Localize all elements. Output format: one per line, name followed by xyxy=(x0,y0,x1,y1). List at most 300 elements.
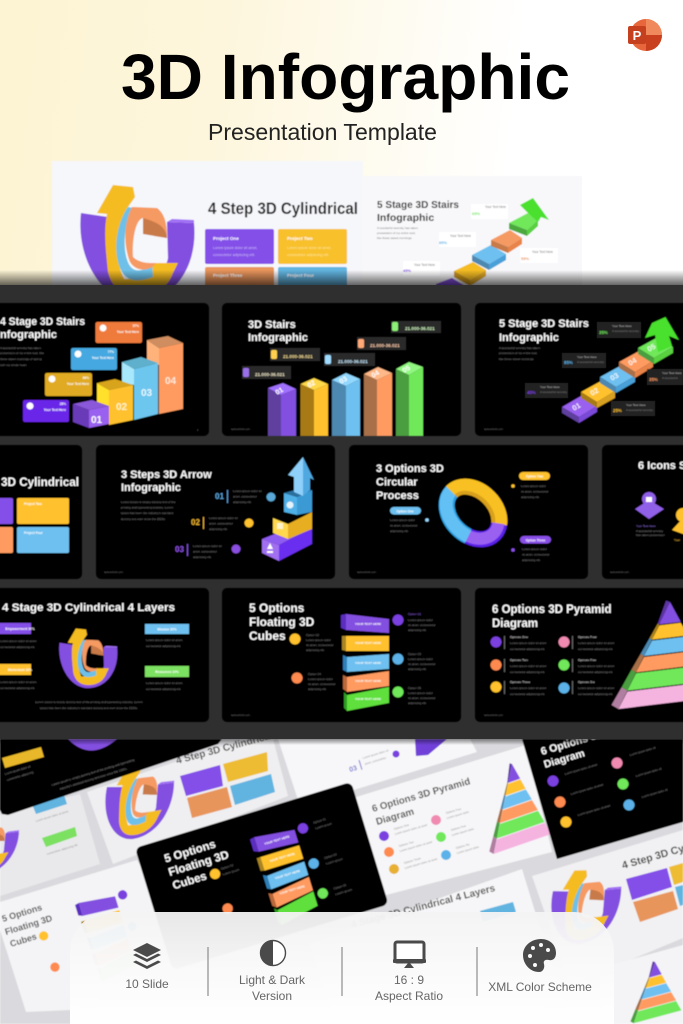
option list: consectetur adipiscing elit. xyxy=(510,647,545,651)
3D cylinder illustration xyxy=(80,185,195,302)
label: green: consectetur adipiscing elit. xyxy=(146,687,181,691)
value tags xyxy=(242,321,441,379)
slide heading: 4 Step 3D Cylindrical xyxy=(175,730,274,767)
light slide: 5 options cubes left: Floating 3D xyxy=(4,913,54,937)
body text: like these sweet mornings. xyxy=(377,236,413,240)
dark slide: 5 options floating cubes center: 5 Options xyxy=(163,839,217,866)
slide: 4 Stage 3D Cylindrical 4 Layers xyxy=(0,588,209,722)
icon: yellow marker xyxy=(672,508,683,542)
cube labels: YOUR TEXT HERE xyxy=(355,622,381,626)
option notes: Lorem ipsum dolor xyxy=(408,618,433,622)
footer: www.website.com xyxy=(357,571,376,574)
3D stairs: 03 xyxy=(608,371,620,383)
light slide: 5 options cubes left: Cubes xyxy=(9,931,38,949)
slide heading: Floating 3D xyxy=(249,615,315,629)
page number: 3 xyxy=(197,429,199,432)
icon: purple shop marker: has taken possession xyxy=(636,533,665,537)
step 03: adipiscing elit. xyxy=(193,555,212,559)
cylinder chart xyxy=(59,629,117,688)
icon: PowerPoint logo xyxy=(628,19,662,51)
stat cards: 77% xyxy=(108,350,114,354)
panel: dark showcase band xyxy=(0,285,683,739)
option: blue pill xyxy=(390,507,429,533)
light slide: 3 steps arrow rear: amet, consectetur xyxy=(364,756,387,766)
dark slide: 5 options floating cubes center: YOUR TEXT HERE xyxy=(274,869,301,880)
slide: 6 Icons (cropped) xyxy=(602,445,683,579)
dark slide: 5 options floating cubes center: YOUR TEXT HERE xyxy=(264,834,290,846)
icon: PowerPoint logo: P xyxy=(633,28,642,43)
option notes: sit amet, consectetur xyxy=(308,682,336,686)
option: yellow pill: Lorem ipsum dolor xyxy=(521,484,546,488)
light slide: 3 steps arrow rear: 03 xyxy=(349,765,358,774)
stat boxes: A wonderful serenity xyxy=(626,408,654,412)
slide: 5 Stage 3D Stairs xyxy=(475,303,683,436)
pyramid xyxy=(479,752,551,855)
label: blue: Mission 30% xyxy=(157,628,177,632)
stat cards: Your Text Here xyxy=(67,382,89,386)
dark slide: top left: Lorem ipsum dolor sit xyxy=(4,764,31,776)
light slide: cylindrical layers left: consectetur adipiscing elit. xyxy=(46,842,79,856)
stat boxes: Your Text Here xyxy=(540,385,560,389)
light slide: 5 options cubes left xyxy=(0,860,200,1012)
footer: www.website.com xyxy=(104,571,123,574)
caption: Ipsum has been the industry's standard dummy text ever since the 1500s. xyxy=(40,706,138,710)
option list: Options Five xyxy=(578,658,596,662)
body text xyxy=(499,346,540,361)
band bottom shadow xyxy=(0,739,683,745)
stat labels: 85% xyxy=(439,240,447,245)
stat boxes: A wonderful serenity xyxy=(612,329,640,333)
footer: www.website.com xyxy=(231,714,250,717)
slide heading: 5 Stage 3D Stairs xyxy=(377,199,459,211)
slide: 3 Steps 3D Arrow xyxy=(96,445,335,579)
option notes: adipiscing elit. xyxy=(408,701,427,705)
icon: purple shop marker xyxy=(635,492,665,537)
value tags: 21.000-36.021 xyxy=(255,372,285,377)
subtitle: Presentation Template xyxy=(208,119,437,145)
title: 3D Infographic xyxy=(121,41,570,113)
option: purple pill: sit amet, consectetur xyxy=(522,552,550,556)
option notes: sit amet, consectetur xyxy=(306,643,334,647)
stat boxes: A wonderful serenity xyxy=(540,390,568,394)
body text: possession of my entire soul, xyxy=(377,231,416,235)
option: blue pill: adipiscing elit. xyxy=(390,529,409,533)
stat boxes: A wonderful xyxy=(662,376,678,380)
option markers xyxy=(379,831,389,841)
value tags: 21.000-36.021 xyxy=(405,326,435,331)
card: project three: Project Three xyxy=(213,273,243,278)
step 02: adipiscing elit. xyxy=(209,527,228,531)
option list: Options Six xyxy=(578,680,595,684)
dark slide: 5 options floating cubes center: Lorem ipsum xyxy=(315,821,333,830)
value tags: 21.000-36.021 xyxy=(370,343,400,348)
stat cards: Your Text Here xyxy=(44,408,66,412)
step 01: adipiscing elit. xyxy=(233,500,252,504)
dark slide: top right pyramid: Lorem ipsum dolor sit xyxy=(641,787,668,799)
label: light and dark: Light & Dark xyxy=(239,973,306,987)
light slide: 4 layers cylindrical: 4 Stage 3D Cylindrical 4 Layers xyxy=(350,883,497,931)
option: purple pill: adipiscing elit. xyxy=(522,558,541,562)
stat boxes: Your Text Here xyxy=(662,371,682,375)
stat labels: Your Text Here xyxy=(532,250,553,254)
stat cards: Your Text Here xyxy=(117,330,139,334)
light slide: cylindrical layers left: Lorem ipsum dolor sit amet, xyxy=(35,809,70,823)
option list: consectetur adipiscing elit. xyxy=(578,647,613,651)
floating cubes xyxy=(290,614,404,711)
donut chart xyxy=(433,473,513,553)
body text: like these sweet mornings. xyxy=(499,357,535,361)
caption xyxy=(35,700,143,710)
icon: monitor xyxy=(393,942,426,968)
option list: Lorem ipsum dolor sit amet xyxy=(578,641,614,645)
step 02: 02 xyxy=(191,518,200,527)
stat cards: Your Text Here xyxy=(92,356,114,360)
body text xyxy=(121,500,176,521)
step 01: Lorem ipsum dolor sit xyxy=(233,489,262,493)
option: purple pill: Option Three xyxy=(526,538,546,542)
card: project one: Lorem ipsum dolor sit amet, xyxy=(213,246,257,250)
dark slide: 5 options floating cubes center: YOUR TEXT HERE xyxy=(269,852,295,863)
body text: Lorem Ipsum is simply dummy text of the xyxy=(121,500,176,504)
option list: Lorem ipsum dolor sit amet xyxy=(510,641,546,645)
step 02 xyxy=(191,516,254,531)
label: green: Lorem ipsum dolor sit amet, xyxy=(146,681,183,685)
icon: palette xyxy=(523,939,556,972)
label: aspect ratio: 16 : 9 xyxy=(394,973,424,987)
slide heading xyxy=(248,319,308,344)
slide heading: 5 Options xyxy=(249,601,305,615)
slide heading xyxy=(499,318,589,344)
option list: Lorem ipsum dolor sit amet xyxy=(510,664,546,668)
light slide: 4 step cylindrical right xyxy=(532,830,683,985)
cube labels: YOUR TEXT HERE xyxy=(355,679,381,683)
dark slide: 5 options floating cubes center: Lorem ipsum xyxy=(222,867,240,876)
option list: Options Three xyxy=(510,680,531,684)
label: light and dark xyxy=(239,973,306,1003)
step 02: Lorem ipsum dolor sit xyxy=(209,516,238,520)
3D bars: 03 xyxy=(141,388,153,399)
option: yellow pill xyxy=(511,472,550,499)
option: purple pill: Lorem ipsum dolor xyxy=(522,547,547,551)
option: yellow pill: adipiscing elit. xyxy=(521,495,540,499)
panel: 4 Step 3D Cylindrical light slide xyxy=(52,161,363,302)
divider xyxy=(342,947,343,996)
light slide: 6 options pyramid xyxy=(340,745,552,905)
stat cards: 28% xyxy=(60,402,66,406)
step 01 xyxy=(215,489,276,504)
stat labels: 45% xyxy=(403,268,411,273)
option notes: sit amet, consectetur xyxy=(408,623,436,627)
option notes: Option 05 xyxy=(408,686,421,690)
slide: 5 Options Floating 3D Cubes xyxy=(222,588,461,722)
panel: feature bar xyxy=(70,912,614,1024)
stat cards: 57% xyxy=(133,324,139,328)
3D columns xyxy=(268,362,423,436)
dark slide: 5 options floating cubes center xyxy=(135,782,389,970)
stat boxes xyxy=(525,322,683,416)
slide: 4 Stage 3D Stairs xyxy=(0,303,209,436)
stat boxes: 35% xyxy=(599,330,608,335)
label: yellow xyxy=(0,664,37,690)
cube labels: YOUR TEXT HERE xyxy=(355,641,381,645)
option notes: Lorem ipsum dolor xyxy=(408,691,433,695)
light slide: 6 options pyramid: Lorem ipsum dolor sit amet xyxy=(404,857,438,870)
stat labels: 55% xyxy=(521,256,529,261)
body text: possession of my entire soul, xyxy=(499,351,538,355)
3D bars xyxy=(73,336,183,428)
option notes: Option 03 xyxy=(408,652,421,656)
value tags: 21.000-36.021 xyxy=(283,354,313,359)
stat boxes: 25% xyxy=(613,408,622,413)
option list: Lorem ipsum dolor sit amet xyxy=(578,664,614,668)
project cards xyxy=(626,868,672,900)
label: yellow: Momentum 20% xyxy=(8,668,32,672)
label: blue xyxy=(145,624,189,648)
cube labels: YOUR TEXT HERE xyxy=(355,697,381,701)
step 01: 01 xyxy=(215,492,224,501)
pyramid xyxy=(612,594,683,710)
stat labels xyxy=(403,204,558,276)
stat labels: Your Text Here xyxy=(450,234,471,238)
dark slide: 5 options floating cubes center: Option 03 xyxy=(324,852,338,860)
footer: www.website.com xyxy=(484,714,503,717)
icon: yellow marker: Your xyxy=(674,538,680,542)
divider xyxy=(208,947,209,996)
slide: 3 Options 3D Circular Process xyxy=(349,445,588,579)
icon: purple shop marker: A wonderful serenity xyxy=(636,529,664,533)
option notes: adipiscing elit. xyxy=(308,687,327,691)
stat boxes: Your Text Here xyxy=(612,324,632,328)
body text: dummy text ever since the 1500s. xyxy=(121,517,166,521)
body text: possession of my entire soul, like xyxy=(0,351,44,355)
light slide: 6 options pyramid: Lorem ipsum dolor xyxy=(451,827,475,837)
dark slide: 5 options floating cubes center: Lorem ipsum xyxy=(325,857,344,866)
project cards: Project Four xyxy=(24,531,44,535)
option: purple pill xyxy=(511,536,551,562)
slide heading: 4 Stage 3D Stairs xyxy=(0,316,85,328)
slide heading: 4 Step 3D Cylindrical xyxy=(208,200,358,218)
light slide: 6 options pyramid: Options Five xyxy=(450,824,467,832)
option notes: Option 04 xyxy=(308,672,321,676)
project cards: Project Two xyxy=(24,502,42,506)
label: color scheme: XML Color Scheme xyxy=(488,980,592,994)
option notes: adipiscing elit. xyxy=(306,648,325,652)
stat boxes: 85% xyxy=(564,360,573,365)
option list: consectetur adipiscing elit. xyxy=(578,670,613,674)
light slide: 6 options pyramid: Diagram xyxy=(375,806,416,828)
panel: 5 Stage 3D Stairs light slide xyxy=(363,176,582,289)
dark slide: top right pyramid: Lorem ipsum dolor sit xyxy=(635,766,662,778)
slide heading xyxy=(492,604,612,630)
3D columns: 03 xyxy=(338,376,349,386)
light slide: 4 layers cylindrical xyxy=(310,869,563,1024)
light slide: 6 options pyramid: Options Two xyxy=(398,840,415,848)
body text xyxy=(377,226,418,240)
label: purple: Empowerment 30% xyxy=(5,627,35,631)
body text: A wonderful serenity has taken xyxy=(499,346,540,350)
slide heading: 4 Stage 3D Cylindrical 4 Layers xyxy=(2,602,175,614)
slide heading: 5 Stage 3D Stairs xyxy=(499,318,589,330)
card: project two: Project Two xyxy=(287,236,313,241)
option list: Options One xyxy=(510,635,528,639)
light slide: 6 options pyramid: Options Four xyxy=(445,807,462,815)
slide heading: 3D Cylindrical xyxy=(1,477,79,489)
card: project four xyxy=(278,267,347,289)
slide heading xyxy=(121,469,212,494)
slide heading: Circular xyxy=(376,476,418,488)
slide: 4 Step 3D Cylindrical (cropped) xyxy=(0,445,82,579)
body text: A wonderful serenity has taken xyxy=(0,346,41,350)
footer: www.website.com xyxy=(610,571,629,574)
option list: Lorem ipsum dolor sit amet xyxy=(578,686,614,690)
slide heading xyxy=(249,601,315,643)
3D bars: 02 xyxy=(116,402,128,413)
cylinder xyxy=(100,758,177,844)
option list: consectetur adipiscing elit. xyxy=(578,692,613,696)
stat cards xyxy=(23,322,142,422)
label: aspect ratio: Aspect Ratio xyxy=(375,989,443,1003)
light slide: 6 options pyramid: Options Six xyxy=(455,842,471,850)
label: blue: Lorem ipsum dolor sit amet, xyxy=(146,638,183,642)
card: project one: consectetur adipiscing elit. xyxy=(213,253,255,257)
slide: 6 Options 3D Pyramid Diagram xyxy=(475,588,683,722)
option notes: adipiscing elit. xyxy=(408,628,427,632)
dark slide: top right pyramid: Lorem ipsum dolor sit amet xyxy=(577,803,611,817)
light slide: 6 options pyramid: Lorem ipsum dolor xyxy=(456,845,480,855)
slide heading xyxy=(376,463,444,502)
light slide: cylindrical layers left xyxy=(0,794,100,896)
footer: www.website.com xyxy=(484,428,503,431)
card: project one: Project One xyxy=(213,236,239,241)
option: blue pill: Lorem ipsum dolor xyxy=(390,518,415,522)
step 03: 03 xyxy=(175,545,184,554)
stat cards: 66% xyxy=(83,376,89,380)
option list: Lorem ipsum dolor sit amet xyxy=(510,686,546,690)
card: project two xyxy=(278,229,347,264)
slide heading: Cubes xyxy=(249,629,286,643)
option notes: adipiscing elit. xyxy=(408,667,427,671)
option notes: sit amet, consectetur xyxy=(408,662,436,666)
dark slide: top right pyramid: Lorem ipsum dolor sit xyxy=(629,745,656,757)
light slide: 5 options cubes left: 5 Options xyxy=(1,902,43,924)
slide: 3D Stairs xyxy=(222,303,461,436)
divider xyxy=(476,947,478,996)
light slide: 6 options pyramid: Lorem ipsum dolor sit amet xyxy=(394,823,428,836)
card: project four: Project Four xyxy=(287,273,314,278)
label: purple: consectetur adipiscing elit. xyxy=(0,645,35,649)
dark slide: 5 options floating cubes center: Floating 3D xyxy=(167,849,230,879)
stat labels: 65% xyxy=(472,211,480,216)
dark slide: 5 options floating cubes center: Cubes xyxy=(171,871,208,892)
slide heading: 6 Options 3D Pyramid xyxy=(492,604,612,616)
dark slide: top right pyramid xyxy=(522,728,683,859)
option notes xyxy=(306,612,436,705)
option: blue pill: sit amet, consectetur xyxy=(390,524,418,528)
stat boxes: 35% xyxy=(649,377,658,382)
label: blue: consectetur adipiscing elit. xyxy=(146,644,181,648)
option notes: Option 01 xyxy=(408,612,421,616)
value tags: 21.000-36.021 xyxy=(338,359,368,364)
card: project three xyxy=(205,267,274,289)
project cards xyxy=(0,498,69,553)
dark slide: top left: consectetur adipiscing xyxy=(6,770,34,782)
dark slide: top left xyxy=(0,739,222,815)
label: purple xyxy=(0,623,37,649)
dark slide: top left: Lorem ipsum is simply dummy text of the printing and typesetting xyxy=(51,758,135,787)
label: purple: Lorem ipsum dolor sit amet, xyxy=(0,639,37,643)
light slide: 6 options pyramid: Lorem ipsum dolor xyxy=(446,810,470,820)
3D stairs: 04 xyxy=(626,355,639,368)
option list: Options Four xyxy=(578,635,598,639)
dark slide: 5 options floating cubes center: Lorem ipsum xyxy=(335,887,353,896)
stat labels: Your Text Here xyxy=(485,205,506,209)
light slide: 3 steps arrow rear xyxy=(278,739,477,806)
step 02: amet, consectetur xyxy=(209,522,233,526)
label: yellow: Lorem ipsum dolor sit amet, xyxy=(0,680,37,684)
body text: these sweet mornings of spring xyxy=(0,357,42,361)
stat boxes: A wonderful serenity xyxy=(577,360,605,364)
slide heading: Process xyxy=(376,490,419,502)
slide heading: Infographic xyxy=(121,482,181,494)
slide heading: Diagram xyxy=(492,618,538,630)
card: project two: Lorem ipsum dolor sit amet, xyxy=(287,246,331,250)
3D stairs xyxy=(562,317,679,423)
label: light and dark: Version xyxy=(252,989,292,1003)
stat labels: Your Text Here xyxy=(414,263,435,267)
3D columns: 04 xyxy=(370,370,381,380)
light slide: 6 options pyramid: Options One xyxy=(393,823,410,831)
option notes: Lorem ipsum dolor xyxy=(408,657,433,661)
label: green: Resources 10% xyxy=(155,670,179,674)
cylinder xyxy=(546,864,624,948)
icon: purple shop marker: Your Text Here xyxy=(636,524,656,528)
3D stairs: 01 xyxy=(570,401,582,413)
body text: printing and typesetting industry. Lorem xyxy=(121,506,174,510)
dark slide: top right pyramid: Lorem ipsum dolor sit amet xyxy=(570,782,604,796)
light slide: 6 options pyramid: Options Three xyxy=(403,856,422,865)
band top shadow xyxy=(0,270,683,285)
option notes: Lorem ipsum dolor xyxy=(306,638,331,642)
step 03 xyxy=(175,544,240,559)
project cards xyxy=(180,765,223,796)
label: 10 slide: 10 Slide xyxy=(125,977,169,991)
3D bars: 04 xyxy=(165,376,177,387)
3D arrow stack xyxy=(262,457,314,561)
3D stairs: 05 xyxy=(646,342,657,354)
option: yellow pill: Option Two xyxy=(526,474,543,478)
slide heading: 6 Options 3D Pyramid xyxy=(371,776,472,815)
option: yellow pill: sit amet, consectetur xyxy=(521,490,549,494)
cube labels xyxy=(355,622,381,701)
3D columns: 02 xyxy=(306,380,317,390)
dark slide: top right pyramid: Diagram xyxy=(542,747,586,771)
far right pyramid xyxy=(628,954,681,1024)
body text: A wonderful serenity has taken xyxy=(377,226,418,230)
caption: Lorem ipsum is simply dummy text of the printing and typesetting industry. Lorem xyxy=(35,700,143,704)
option notes: Lorem ipsum dolor xyxy=(308,677,333,681)
card: project one xyxy=(205,229,274,264)
stat boxes: Your Text Here xyxy=(577,355,597,359)
body text xyxy=(0,346,44,367)
dark slide: top right pyramid: 6 Options 3D xyxy=(539,728,605,758)
slide heading: 3 Steps 3D Arrow xyxy=(121,469,212,481)
option list: consectetur adipiscing elit. xyxy=(510,692,545,696)
slide heading: 3 Options 3D xyxy=(376,463,444,475)
body text: with my whole heart. xyxy=(0,363,28,367)
slide heading: 3D Stairs xyxy=(248,319,296,331)
dark slide: top left: industry's standard dummy text ever since the 1500s. xyxy=(59,766,128,791)
slide heading: Infographic xyxy=(248,332,308,344)
